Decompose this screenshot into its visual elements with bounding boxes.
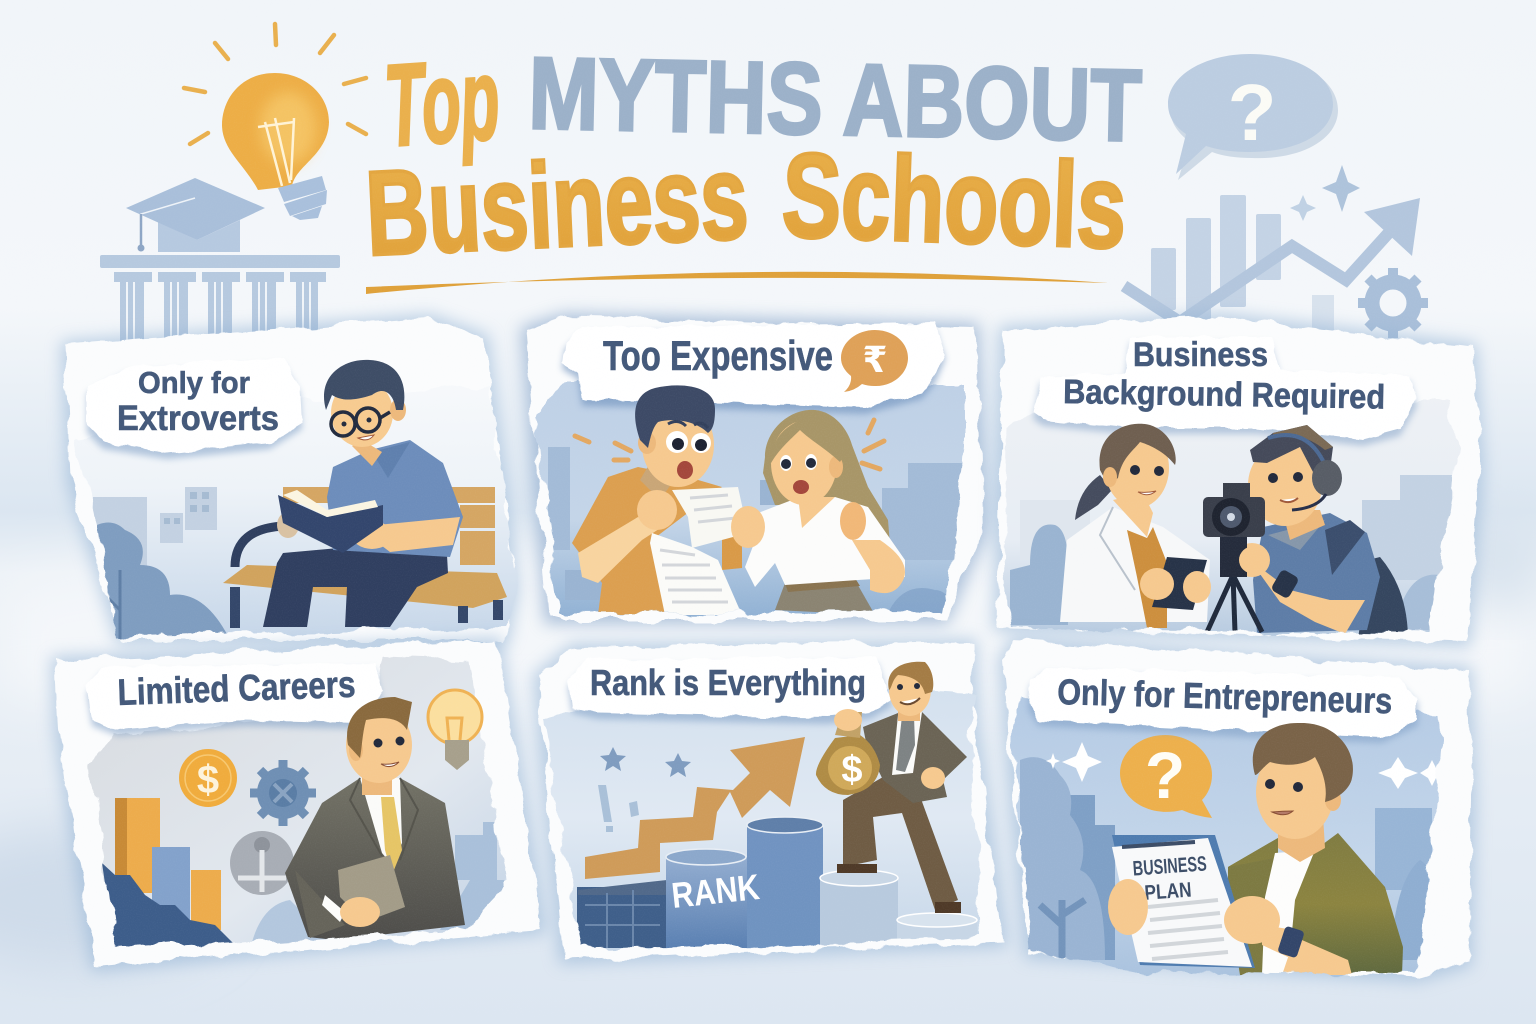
scene backdrop: rank chart [535,680,1005,955]
scene: entrepreneur with business plan [1108,723,1403,975]
label: Business Background Required: Background Required [1063,373,1385,417]
icon: rupee bubble: ₹ [862,340,888,381]
icon: graduation cap [126,178,265,252]
scene: reader on bench [223,360,507,628]
scene: businessman with money bag [816,662,967,913]
title word: Top: Top [381,33,503,171]
icon: light bulb [184,24,366,220]
label: Too Expensive: Too Expensive [603,332,833,379]
label: Only for Extroverts [87,358,302,459]
label: Only for Extroverts: Extroverts [117,399,279,438]
label: Limited Careers [87,663,382,736]
label: Rank is Everything [568,657,892,724]
icon: columned building [100,255,340,344]
icon: gear [250,760,316,826]
label: Business Background Required [1033,336,1417,446]
scene: entrepreneur with business plan: BUSINESS [1132,852,1207,881]
icon: growth chart with arrow and gear [1124,165,1428,338]
icon: rupee bubble [841,330,908,392]
icon: question speech bubble: ? [1228,68,1276,157]
scene: entrepreneur with business plan: PLAN [1144,879,1192,905]
panel: Only for Entrepreneurs [1000,640,1472,980]
scene backdrop: skyline [534,380,966,618]
videographer [1203,425,1408,640]
label: Only for Extroverts: Only for [138,365,250,400]
label: Limited Careers: Limited Careers [117,664,356,713]
panel: Business Background Required [997,317,1480,643]
title [363,33,1143,294]
label: Too Expensive [562,323,945,414]
title word: Schools: Schools [780,128,1129,274]
scientist [1060,424,1211,628]
label: Rank is Everything: Rank is Everything [590,662,866,703]
scene: scientist and videographer [1060,424,1408,640]
scene: professional with light bulb [285,690,482,940]
panel: Only for Extroverts [60,318,530,645]
reader [263,360,463,627]
title word: Business: Business [363,130,751,281]
businessman [285,697,465,940]
scene backdrop: city and career icons [80,650,520,955]
woman [745,410,905,615]
rank cylinders [666,817,977,948]
icon: question bubble [1120,735,1212,818]
scene backdrop: trees, skyline and question bubble [1000,690,1470,980]
icon: dollar coin: $ [197,758,219,802]
scene backdrop: city and trees [74,404,516,640]
scene: businessman with money bag: $ [841,749,863,791]
scene: shocked couple with bill [572,385,905,615]
bench [223,487,507,628]
panel: Too Expensive [520,317,990,620]
label: Only for Entrepreneurs: Only for Entrepreneurs [1057,671,1393,721]
man [572,385,765,615]
icon: question bubble: ? [1145,738,1185,812]
growth arrow [585,737,805,879]
icon: dollar coin [179,749,237,807]
panel: Rank is Everything [535,643,1005,960]
scene backdrop: skyline and trees [1000,390,1470,640]
icon: bulb [428,690,482,770]
icon: question speech bubble [1168,54,1338,180]
panel: Limited Careers [55,640,542,967]
title line: Myths About: MYTHS ABOUT [528,36,1143,163]
label: Business Background Required: Business [1133,336,1268,374]
scene backdrop: rank chart: RANK [670,866,761,916]
title underline [366,272,1108,294]
label: Only for Entrepreneurs [1028,667,1418,743]
